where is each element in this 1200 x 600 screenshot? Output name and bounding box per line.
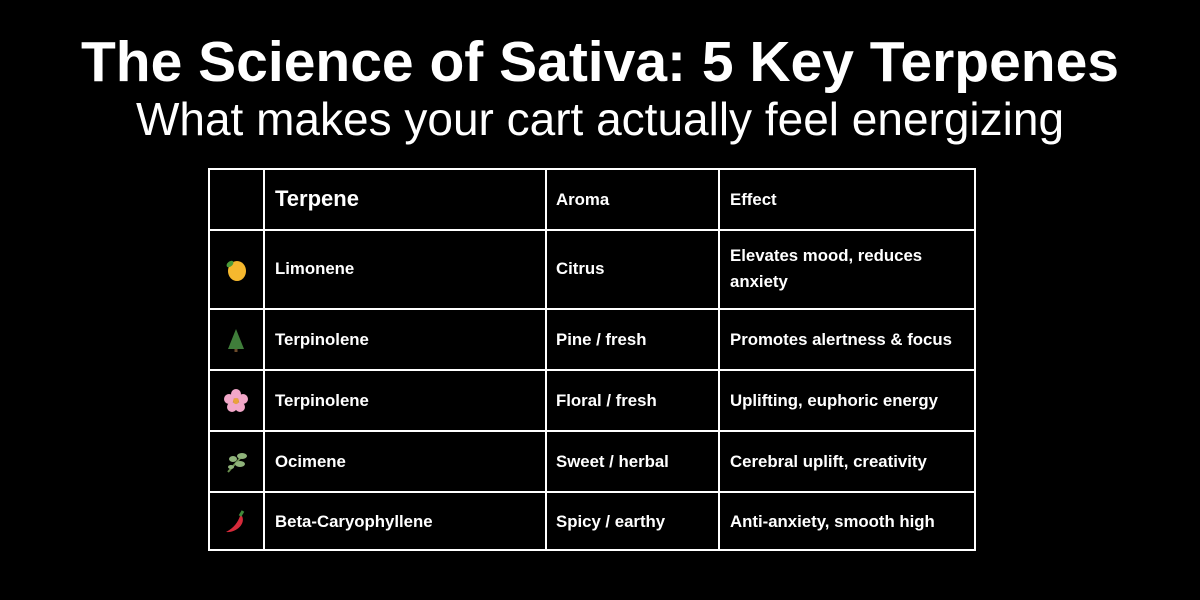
- row: ocimene: Sweet / herbal: [556, 452, 669, 471]
- header row: Aroma: [556, 190, 609, 209]
- row: terpinolene pine: Terpinolene: [275, 330, 369, 349]
- table: [208, 168, 976, 551]
- row: terpinolene floral: Uplifting, euphoric energy: [730, 391, 938, 410]
- row: beta-caryophyllene: Beta-Caryophyllene: [275, 512, 433, 531]
- header row: Effect: [730, 190, 777, 209]
- header row: [275, 186, 777, 211]
- row: terpinolene pine: Pine / fresh: [556, 330, 646, 349]
- row: limonene: Citrus: [556, 259, 604, 278]
- row: terpinolene floral: [224, 389, 938, 412]
- row: beta-caryophyllene: [226, 510, 935, 532]
- icon: lemon: [226, 260, 246, 281]
- row: beta-caryophyllene: Spicy / earthy: [556, 512, 665, 531]
- title: The Science of Sativa: 5 Key Terpenes: [81, 30, 1119, 94]
- row: limonene: Limonene: [275, 259, 354, 278]
- row: limonene: Elevates mood, reduces: [730, 246, 922, 265]
- row: terpinolene floral: Floral / fresh: [556, 391, 657, 410]
- icon: tree: [228, 329, 244, 352]
- header row: Terpene: [275, 186, 359, 211]
- row: limonene: anxiety: [730, 272, 788, 291]
- row: terpinolene floral: Terpinolene: [275, 391, 369, 410]
- row: terpinolene pine: Promotes alertness & focus: [730, 330, 952, 349]
- icon: flower: [224, 389, 248, 412]
- subtitle: What makes your cart actually feel energizing: [136, 93, 1064, 145]
- icon: chili: [226, 510, 244, 532]
- row: ocimene: Ocimene: [275, 452, 346, 471]
- row: ocimene: Cerebral uplift, creativity: [730, 452, 927, 471]
- row: limonene: [226, 246, 922, 291]
- row: beta-caryophyllene: Anti-anxiety, smooth high: [730, 512, 935, 531]
- row: terpinolene pine: [228, 329, 952, 352]
- icon: herb: [227, 453, 247, 473]
- row: ocimene: [227, 452, 927, 473]
